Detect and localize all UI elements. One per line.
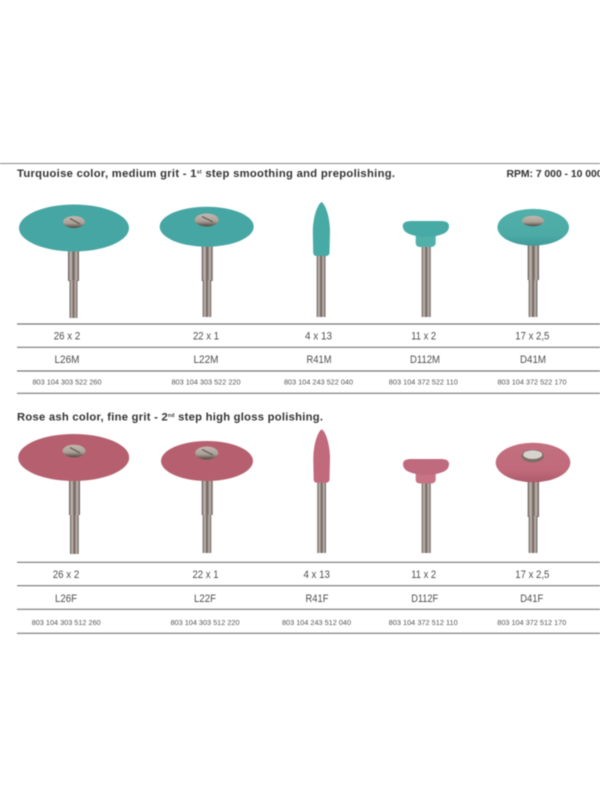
icon: D112M cup polisher (403, 221, 449, 317)
table: turquoise specifications: 803 104 243 522 040 (284, 377, 353, 386)
table: rose ash specifications (17, 562, 600, 633)
panel: turquoise medium grit (17, 168, 600, 393)
icon: R41M bullet polisher (313, 202, 330, 317)
table: turquoise specifications: 803 104 372 522 110 (389, 377, 458, 386)
table: rose ash specifications: L22F (194, 593, 216, 605)
table: turquoise specifications: L22M (194, 354, 218, 366)
table: turquoise specifications: 803 104 303 522 260 (32, 377, 102, 386)
RPM label: RPM: 7 000 - 10 000 (506, 169, 600, 180)
table: rose ash specifications: R41F (306, 593, 329, 605)
panel: rose ash fine grit (17, 412, 600, 633)
table: turquoise specifications: 803 104 372 522 170 (498, 377, 566, 386)
icon: L22M disc polisher (160, 207, 254, 317)
table: turquoise specifications (17, 324, 600, 393)
heading: turquoise section: st (197, 170, 202, 176)
icon: D112F cup polisher (403, 459, 449, 553)
table: rose ash specifications: 803 104 303 512 220 (170, 618, 240, 627)
table: rose ash specifications: 26 x 2 (53, 569, 79, 581)
table: rose ash specifications: 803 104 243 512 040 (282, 618, 351, 627)
heading: turquoise section: step smoothing and prepolishing. (202, 168, 395, 180)
table: turquoise specifications: 4 x 13 (305, 330, 332, 342)
table: rose ash specifications: 17 x 2,5 (515, 569, 549, 581)
icon: R41F bullet polisher (313, 429, 330, 553)
table: rose ash specifications: 11 x 2 (411, 569, 436, 581)
table: turquoise specifications: D41M (520, 354, 546, 366)
icon: L26M disc polisher (19, 204, 129, 318)
table: rose ash specifications: D112F (411, 593, 438, 605)
heading: turquoise section: Turquoise color, medium grit - 1 (17, 168, 197, 180)
table: rose ash specifications: 22 x 1 (192, 569, 218, 581)
heading: rose ash section: step high gloss polishing. (175, 412, 323, 424)
table: turquoise specifications: 26 x 2 (54, 330, 80, 342)
icon: D41M wheel polisher (497, 209, 569, 317)
icon: L26F disc polisher (18, 434, 129, 554)
heading: rose ash section: Rose ash color, fine grit - 2 (17, 412, 168, 424)
table: turquoise specifications: 22 x 1 (193, 330, 219, 342)
table: rose ash specifications: 803 104 372 512 110 (389, 618, 458, 627)
table: turquoise specifications: R41M (306, 354, 332, 366)
table: turquoise specifications: 17 x 2,5 (515, 330, 549, 342)
table: turquoise specifications: L26M (54, 354, 80, 366)
icon: L22F disc polisher (161, 441, 253, 553)
heading: rose ash section: nd (168, 413, 174, 419)
table: rose ash specifications: D41F (520, 593, 543, 605)
table: rose ash specifications: 803 104 372 512 170 (497, 618, 566, 627)
table: rose ash specifications: L26F (55, 593, 77, 605)
icon: D41F wheel polisher (496, 443, 570, 553)
table: rose ash specifications: 803 104 303 512 260 (32, 618, 101, 627)
table: turquoise specifications: 803 104 303 522 220 (172, 377, 240, 386)
table: turquoise specifications: D112M (410, 354, 440, 366)
table: rose ash specifications: 4 x 13 (303, 569, 330, 581)
table: turquoise specifications: 11 x 2 (411, 330, 436, 342)
